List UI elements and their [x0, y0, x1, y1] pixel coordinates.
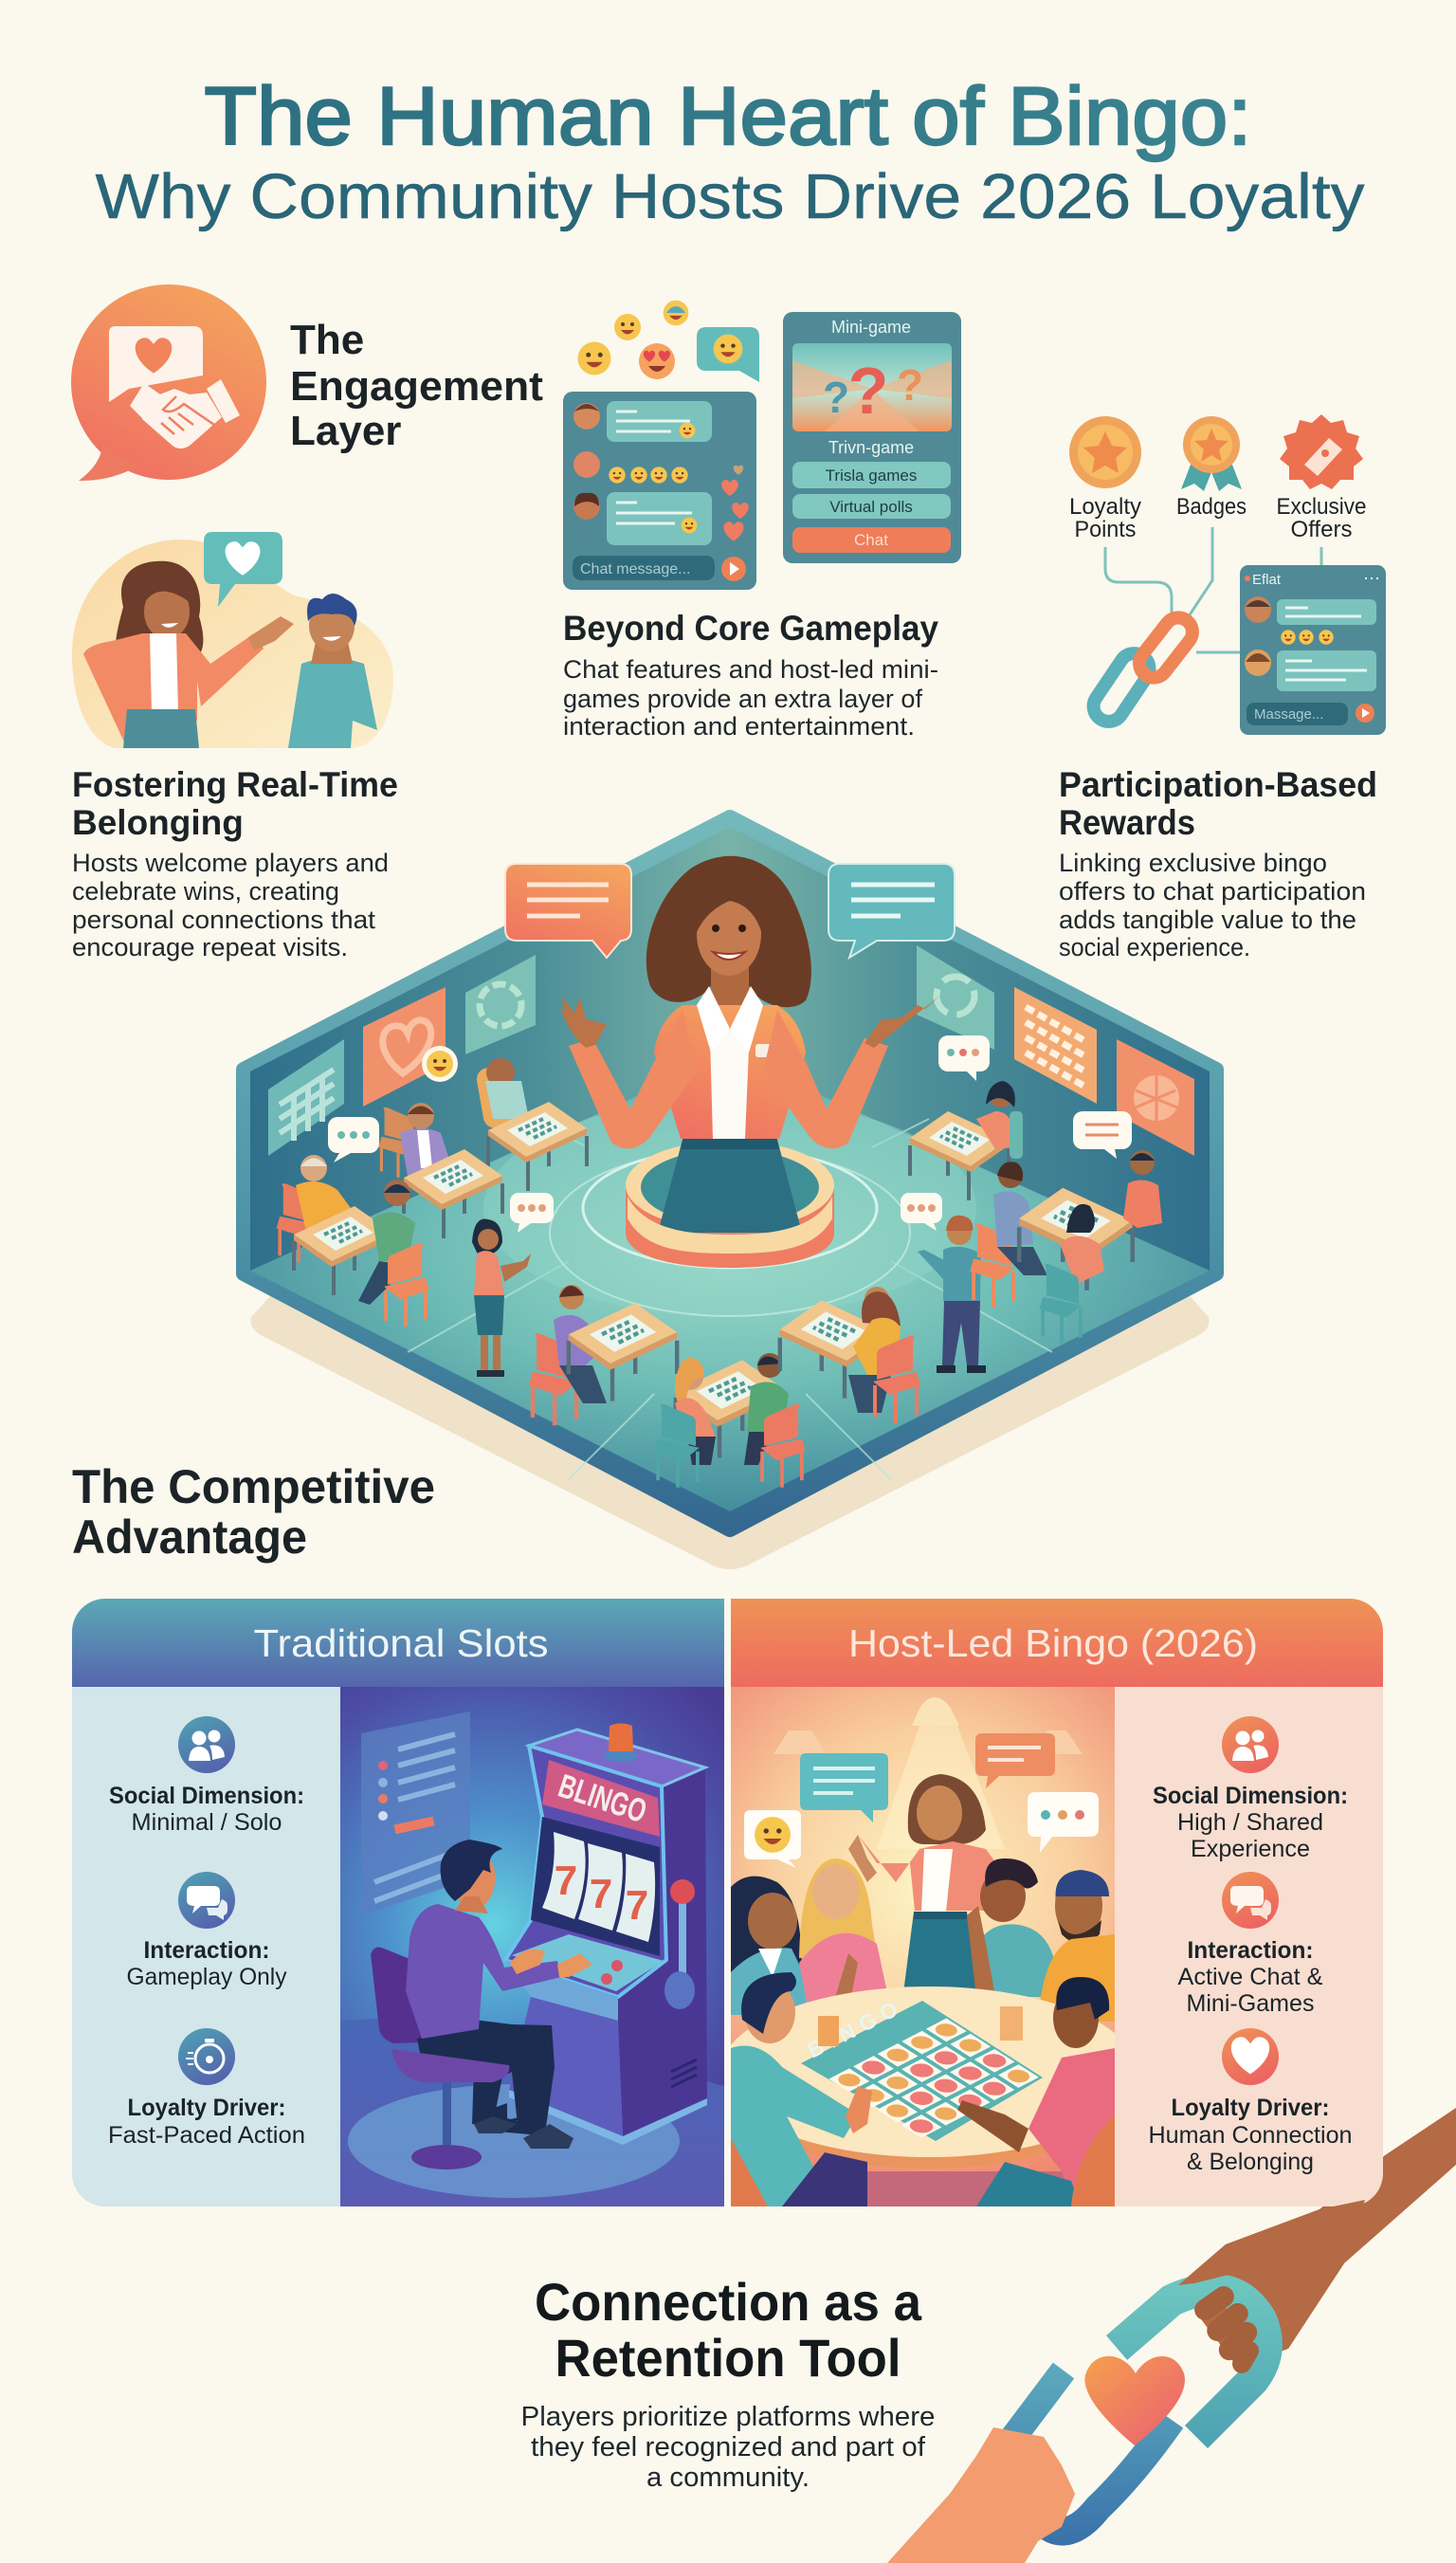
illustration: friends playing bingo with host: [720, 1687, 1138, 2206]
host header: [731, 1599, 1383, 1687]
slot attribute: interaction: [127, 1872, 287, 1990]
cup: [1000, 2006, 1023, 2041]
chat panel: [563, 392, 756, 590]
upper fingers: [1191, 2282, 1263, 2377]
seated woman left: [731, 1876, 808, 2015]
icon: chain link: [1087, 612, 1198, 727]
bubble emoji: [744, 1810, 801, 1868]
back right wall: [730, 827, 1210, 1271]
labels: reward types: Offers: [1291, 517, 1352, 542]
host attribute: loyalty driver: [1149, 2028, 1352, 2175]
players: left table: [277, 1155, 429, 1327]
name badge: [755, 1044, 784, 1057]
slot attribute: interaction: Gameplay Only: [127, 1964, 287, 1990]
title: [95, 71, 1365, 232]
round table: [720, 1986, 1138, 2169]
mini-game panel: Virtual polls: [829, 498, 913, 516]
wall screen: bingo card: [1014, 987, 1097, 1104]
room floor: [250, 1054, 1210, 1511]
player: [406, 1840, 592, 2149]
heading: the engagement layer: Engagement: [290, 363, 543, 410]
host attribute: social dimension: Social Dimension:: [1153, 1783, 1348, 1809]
reels: [542, 1832, 655, 1942]
labels: reward types: Loyalty: [1069, 494, 1141, 520]
reels: 7: [626, 1882, 648, 1929]
wall screen: teal ring: [917, 945, 994, 1050]
mini-game panel: ?: [897, 360, 923, 410]
wall screen: teal swirl: [465, 955, 536, 1054]
man front right: [957, 1977, 1115, 2206]
shirt: [709, 1003, 751, 1139]
text: rewards description: adds tangible value to the: [1059, 906, 1356, 934]
wall screen: globe: [1117, 1039, 1194, 1156]
lamps: [774, 1697, 1083, 1849]
reels: 7: [590, 1871, 612, 1917]
bubble teal: [800, 1753, 888, 1822]
host attributes column: [1115, 1687, 1383, 2206]
heading: the competitive advantage: Advantage: [72, 1510, 307, 1564]
illustration: connection chain arm (behind panel): [1178, 2108, 1456, 2368]
cup left: [818, 2016, 839, 2046]
link blue lower piece: [1048, 2420, 1172, 2532]
back left wall: [250, 827, 730, 1271]
host attribute: social dimension: [1153, 1716, 1348, 1862]
chair seat: [391, 2049, 509, 2082]
mini-game panel: Chat: [854, 531, 888, 549]
host speech bubble: orange: [505, 864, 631, 958]
slot attribute: social dimension: Social Dimension:: [109, 1783, 304, 1809]
wall screen: calendar: [268, 1039, 344, 1156]
host attribute: social dimension: High / Shared: [1177, 1809, 1323, 1836]
slots header: Traditional Slots: [254, 1621, 548, 1665]
right table cluster: [970, 1150, 1162, 1343]
illustration: host greets player: [72, 532, 393, 748]
reels: 7: [555, 1858, 577, 1904]
hair: [646, 856, 811, 1007]
bingo board: [801, 1993, 1043, 2141]
lamp: [604, 1724, 638, 1762]
slot attribute: loyalty driver: Fast-Paced Action: [108, 2122, 305, 2149]
host attribute: social dimension: Experience: [1191, 1836, 1310, 1862]
connectors to chain: [1105, 527, 1321, 652]
text: fostering description: encourage repeat visits.: [72, 933, 348, 961]
heading: fostering real-time belonging: Belonging: [72, 803, 244, 842]
chat panel: Chat message...: [580, 561, 690, 577]
host attribute: loyalty driver: Human Connection: [1149, 2122, 1352, 2149]
slot machine: BLINGO: [554, 1767, 651, 1830]
mini-game panel: [783, 312, 961, 563]
lower hand: [887, 2427, 1075, 2563]
link blue left piece: [1003, 2371, 1064, 2451]
host speech bubble: teal: [828, 864, 955, 958]
jacket: [654, 1005, 806, 1139]
standing woman: [472, 1219, 531, 1377]
slot attribute: loyalty driver: Loyalty Driver:: [127, 2095, 286, 2121]
boy right: [967, 1858, 1055, 1997]
wall screen: heart: [363, 987, 446, 1107]
lower left table: [529, 1285, 677, 1425]
right upper table: [910, 1081, 1023, 1200]
labels: reward types: Exclusive: [1276, 494, 1367, 520]
text: fostering description: celebrate wins, creating: [72, 877, 339, 906]
text: beyond core description: Chat features and host-led mini-: [563, 655, 938, 684]
heading: participation-based rewards: Participation-Based: [1059, 765, 1377, 804]
slot attribute: social dimension: Minimal / Solo: [131, 1809, 282, 1836]
heading: connection as a retention tool: Connection as a: [535, 2272, 922, 2332]
text: fostering description: Hosts welcome players and: [72, 849, 389, 877]
icon: engagement bubble with handshake: [71, 284, 266, 481]
slots attributes column: [72, 1687, 340, 2206]
heading: the engagement layer: Layer: [290, 408, 401, 454]
bearded man: [1038, 1870, 1115, 2022]
icon: loyalty points: [1069, 416, 1141, 488]
panel: host-led bingo: [720, 1599, 1383, 2206]
slot machine: [505, 1730, 707, 2145]
host attribute: interaction: Interaction:: [1187, 1937, 1314, 1964]
speech: emoji and dots: [328, 1046, 554, 1233]
text: rewards description: Linking exclusive bingo: [1059, 849, 1327, 877]
text: retention description: a community.: [646, 2462, 810, 2493]
host header: Host-Led Bingo (2026): [848, 1621, 1258, 1665]
illustration: hands holding chain with heart: [887, 2200, 1365, 2563]
podium: [626, 1185, 834, 1268]
slot attribute: interaction: Interaction:: [144, 1937, 269, 1964]
text: beyond core description: games provide an extra layer of: [563, 685, 922, 713]
hands: [559, 996, 607, 1048]
heart: [1084, 2356, 1185, 2445]
lower right table: [780, 1287, 920, 1423]
text: rewards description: offers to chat participation: [1059, 877, 1366, 906]
room shell: [244, 817, 1216, 1529]
speech: dots and lines: [901, 1035, 1132, 1231]
mini-game panel: ?: [848, 354, 888, 428]
heading: fostering real-time belonging: Fostering Real-Time: [72, 765, 398, 804]
illustration: player at slot machine: [340, 1687, 724, 2206]
mini-game panel: Trisla games: [826, 467, 917, 485]
floor shadow: [250, 1280, 1210, 1569]
host: [848, 1774, 1007, 1993]
mini-game panel: Trivn-game: [828, 438, 914, 457]
host on podium: [559, 856, 940, 1268]
man front left: [731, 1972, 872, 2206]
text: retention description: Players prioritize platforms where: [521, 2402, 935, 2432]
slots header: [72, 1599, 724, 1687]
floating emojis: [578, 301, 759, 382]
host attribute: interaction: Mini-Games: [1187, 1990, 1314, 2017]
skirt: [658, 1136, 802, 1233]
wall screen: [361, 1712, 470, 1915]
chat panel: rewards: Massage...: [1254, 706, 1323, 723]
players: upper left tables: [378, 1058, 587, 1238]
heading: the engagement layer: The: [290, 317, 364, 363]
title: The Human Heart of Bingo:: [205, 71, 1251, 162]
heading: the competitive advantage: The Competitive: [72, 1460, 435, 1513]
link teal upper: [1117, 2290, 1266, 2437]
panel: traditional slots: [72, 1599, 724, 2206]
chat panel: rewards: Eflat: [1252, 572, 1282, 588]
neck and face: [711, 967, 749, 1032]
mini-game panel: ?: [823, 373, 849, 422]
bubble dots: [1028, 1792, 1099, 1853]
chair: [371, 1947, 482, 2169]
arms: [569, 1010, 697, 1148]
text: rewards description: social experience.: [1059, 933, 1250, 961]
text: fostering description: personal connections that: [72, 906, 376, 934]
lever: [664, 1879, 695, 2009]
seated blonde woman: [799, 1858, 886, 2003]
host attribute: interaction: [1177, 1872, 1323, 2017]
standing man: [918, 1216, 986, 1373]
host attribute: loyalty driver: Loyalty Driver:: [1172, 2095, 1329, 2121]
labels: reward types: Badges: [1176, 494, 1247, 520]
slot attribute: loyalty driver: [108, 2028, 305, 2149]
host attribute: loyalty driver: & Belonging: [1187, 2149, 1314, 2175]
central isometric bingo room: [244, 817, 1216, 1569]
heading: participation-based rewards: Rewards: [1059, 803, 1195, 842]
host attribute: interaction: Active Chat &: [1177, 1964, 1323, 1990]
icon: badges: [1181, 416, 1242, 491]
slot attribute: social dimension: [109, 1716, 304, 1836]
text: retention description: they feel recognized and part of: [531, 2432, 926, 2462]
text: beyond core description: interaction and entertainment.: [563, 712, 915, 741]
labels: reward types: Points: [1075, 517, 1136, 542]
chat panel: rewards: [1240, 565, 1386, 735]
heading: beyond core gameplay: Beyond Core Gameplay: [563, 609, 938, 648]
bingo board: BINGO: [803, 1993, 907, 2063]
bubble orange: [975, 1733, 1055, 1788]
bottom centre table: [654, 1353, 806, 1488]
upper palm: [1178, 2200, 1365, 2349]
title: Why Community Hosts Drive 2026 Loyalty: [95, 161, 1365, 232]
mini-game panel: Mini-game: [831, 318, 911, 337]
icon: exclusive offers: [1280, 414, 1363, 489]
heading: connection as a retention tool: Retention Tool: [555, 2328, 901, 2388]
